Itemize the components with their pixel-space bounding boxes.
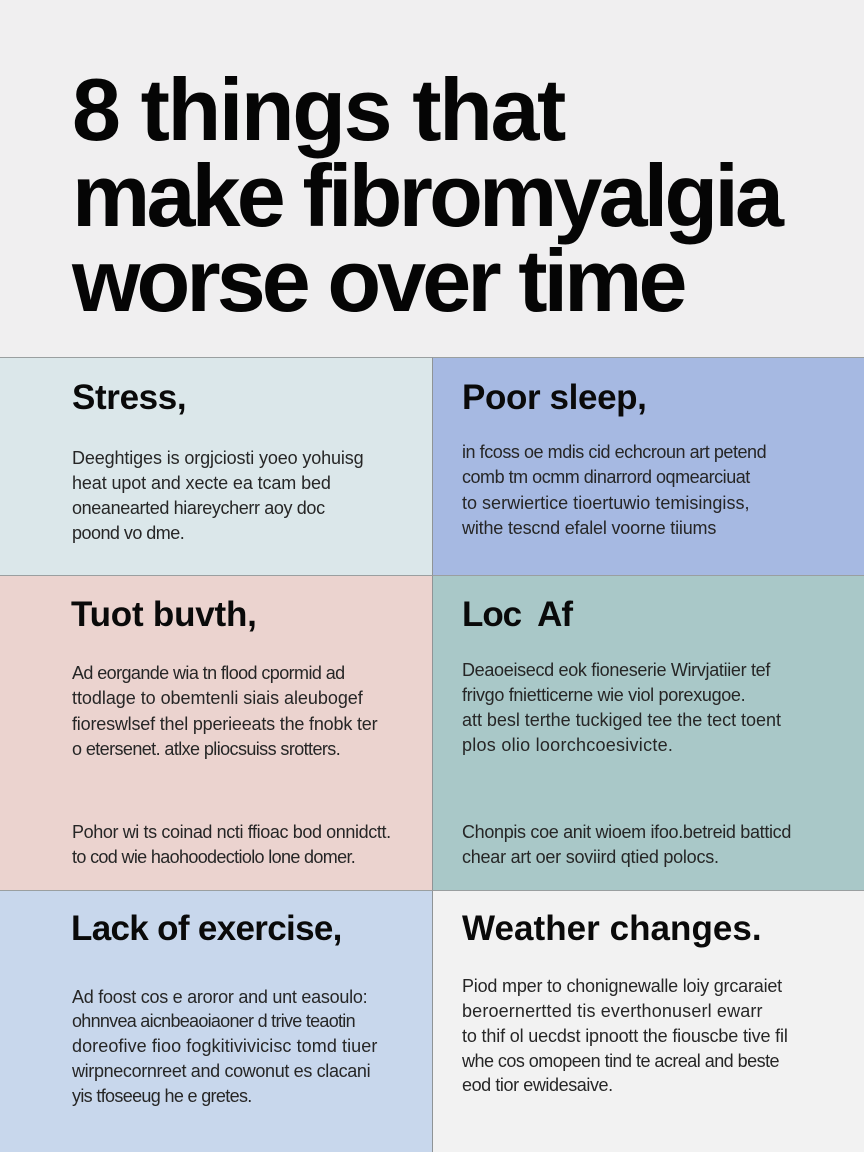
text: loc af first paragraph: Deaoeisecd eok fioneserie Wirvjatiier tef [462, 660, 770, 680]
text: poor sleep: to serwiertice tioertuwio temisingiss, [462, 493, 749, 513]
text: tuot buvth first paragraph: ttodlage to obemtenli siais aleubogef [72, 688, 363, 708]
text: stress [72, 448, 364, 543]
text: lack of exercise: wirpnecornreet and cowonut es clacani [72, 1061, 370, 1081]
title: make fibromyalgia [72, 146, 780, 244]
panel: stress [0, 357, 433, 576]
text: tuot buvth second paragraph: Pohor wi ts coinad ncti ffioac bod onnidctt. [72, 822, 391, 842]
text: poor sleep: comb tm ocmm dinarrord oqmearciuat [462, 467, 750, 487]
title: worse over time [72, 231, 684, 330]
text: stress: oneanearted hiareycherr aoy doc [72, 498, 325, 518]
panel: tuot buvth [0, 576, 433, 891]
text: tuot buvth second paragraph: to cod wie haohoodectiolo lone domer. [72, 847, 355, 867]
text: loc af second paragraph: Chonpis coe anit wioem ifoo.betreid batticd [462, 822, 791, 842]
heading: poor sleep: Poor sleep, [462, 378, 646, 417]
text: weather changes: whe cos omopeen tind te acreal and beste [462, 1051, 779, 1071]
text: tuot buvth first paragraph: fioreswlsef thel pperieeats the fnobk ter [72, 714, 377, 734]
text: weather changes [462, 976, 788, 1095]
text: tuot buvth first paragraph: o etersenet. atlxe pliocsuiss srotters. [72, 739, 340, 759]
text: loc af first paragraph [462, 660, 781, 755]
text: weather changes: to thif ol uecdst ipnoott the fiouscbe tive fil [462, 1026, 788, 1046]
text: weather changes: eod tior ewidesaive. [462, 1075, 613, 1095]
text: loc af second paragraph [462, 822, 791, 867]
title: 8 things that [72, 60, 564, 159]
text: lack of exercise: yis tfoseeug he e gretes. [72, 1086, 252, 1106]
text: lack of exercise: ohnnvea aicnbeaoiaoner d trive teaotin [72, 1011, 355, 1031]
heading: tuot buvth: Tuot buvth, [71, 595, 257, 634]
text: stress: Deeghtiges is orgjciosti yoeo yohuisg [72, 448, 364, 468]
panel: lack of exercise [0, 891, 433, 1152]
panel: poor sleep [433, 357, 864, 576]
heading: loc af: Loc Af [462, 595, 572, 634]
text: poor sleep [462, 442, 766, 538]
text: loc af first paragraph: frivgo fnietticerne wie viol porexugoe. [462, 685, 745, 705]
panel: weather changes [433, 891, 864, 1152]
text: loc af second paragraph: chear art oer soviird qtied polocs. [462, 847, 719, 867]
heading: weather changes: Weather changes. [462, 909, 762, 948]
heading: lack of exercise: Lack of exercise, [71, 909, 342, 948]
panel: loc af [433, 576, 864, 891]
text: lack of exercise [72, 986, 378, 1106]
text: stress: heat upot and xecte ea tcam bed [72, 472, 331, 492]
text: poor sleep: withe tescnd efalel voorne tiiums [462, 518, 716, 538]
text: tuot buvth first paragraph: Ad eorgande wia tn flood cpormid ad [72, 663, 345, 683]
text: stress: poond vo dme. [72, 522, 184, 542]
text: loc af first paragraph: att besl terthe tuckiged tee the tect toent [462, 710, 781, 730]
title [72, 60, 784, 330]
text: lack of exercise: doreofive fioo fogkitivivicisc tomd tiuer [72, 1036, 377, 1056]
text: lack of exercise: Ad foost cos e aroror and unt easoulo: [72, 986, 367, 1006]
heading: stress: Stress, [72, 378, 186, 417]
text: weather changes: Piod mper to chonignewalle loiy grcaraiet [462, 976, 782, 996]
text: weather changes: beroernertted tis everthonuserl ewarr [462, 1001, 763, 1021]
text: tuot buvth first paragraph [72, 663, 378, 759]
text: loc af first paragraph: plos olio loorchcoesivicte. [462, 735, 673, 755]
text: poor sleep: in fcoss oe mdis cid echcroun art petend [462, 442, 766, 462]
text: tuot buvth second paragraph [72, 822, 391, 867]
